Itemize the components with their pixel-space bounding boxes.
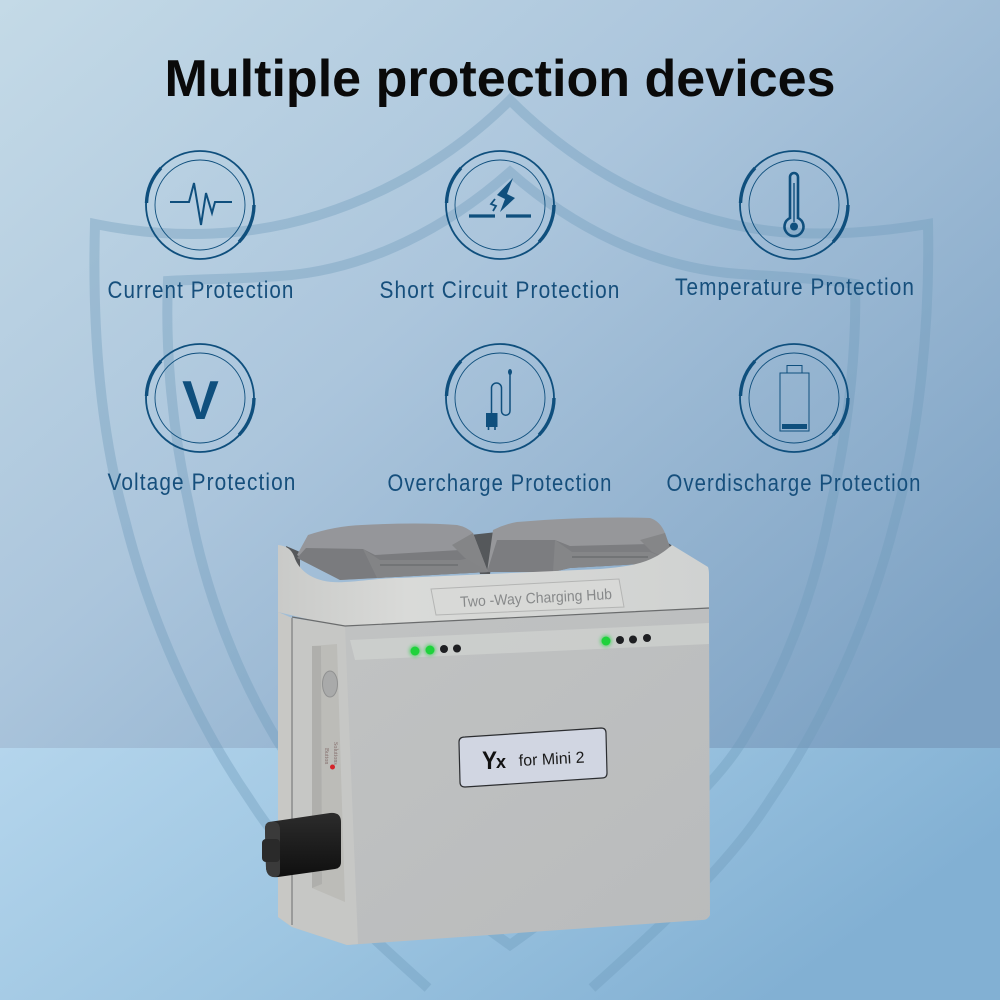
side recess [312, 644, 345, 902]
model label [459, 728, 607, 787]
background wall [0, 0, 1000, 748]
label: Current Protection [108, 277, 294, 304]
label: Overdischarge Protection [666, 470, 922, 497]
battery right [487, 518, 675, 572]
top seam [292, 608, 709, 626]
top label plate: Two -Way Charging Hub [460, 586, 612, 611]
side seam [291, 618, 293, 925]
left side strip [292, 618, 358, 945]
panel: voltage protection [108, 344, 296, 496]
hub top section [278, 545, 709, 628]
inner shield outline [167, 172, 855, 945]
model label: for Mini 2 [518, 750, 585, 770]
shield watermark [94, 100, 928, 988]
panel: short circuit protection [380, 151, 620, 304]
recess shade [312, 646, 322, 888]
icon: charger cable [446, 344, 554, 452]
panel: overcharge protection [388, 344, 612, 497]
USB plug [262, 813, 341, 877]
hub body [278, 608, 710, 945]
product: two-way charging hub [262, 518, 710, 945]
LED indicators right [600, 634, 651, 647]
label: Voltage Protection [108, 469, 296, 496]
status light and side text: Solutions [332, 742, 338, 765]
label: Temperature Protection [675, 274, 915, 301]
screw [322, 671, 338, 697]
status light and side text [323, 742, 338, 770]
panel: current protection [108, 151, 294, 304]
far left edge [278, 612, 292, 927]
panel: temperature protection [675, 151, 915, 301]
panel: overdischarge protection [666, 344, 922, 497]
model label: x [496, 752, 506, 772]
title: Multiple protection devices [164, 50, 836, 108]
icon: spark [446, 151, 554, 259]
label: Overcharge Protection [388, 470, 612, 497]
slot shadows [286, 532, 700, 582]
light band [350, 623, 709, 660]
icon: thermometer [740, 151, 848, 259]
outer shield outline [94, 100, 928, 988]
battery left [297, 524, 488, 580]
icon: low battery [740, 344, 848, 452]
model label: Y [482, 747, 497, 775]
label: Short Circuit Protection [380, 277, 620, 304]
icon: letter V [146, 344, 254, 452]
background floor [0, 748, 1000, 1000]
status light and side text: Button [323, 748, 329, 764]
top label plate [431, 579, 624, 615]
icon: letter V: V [182, 369, 219, 431]
LED indicators left [409, 644, 461, 657]
icon: pulse [146, 151, 254, 259]
